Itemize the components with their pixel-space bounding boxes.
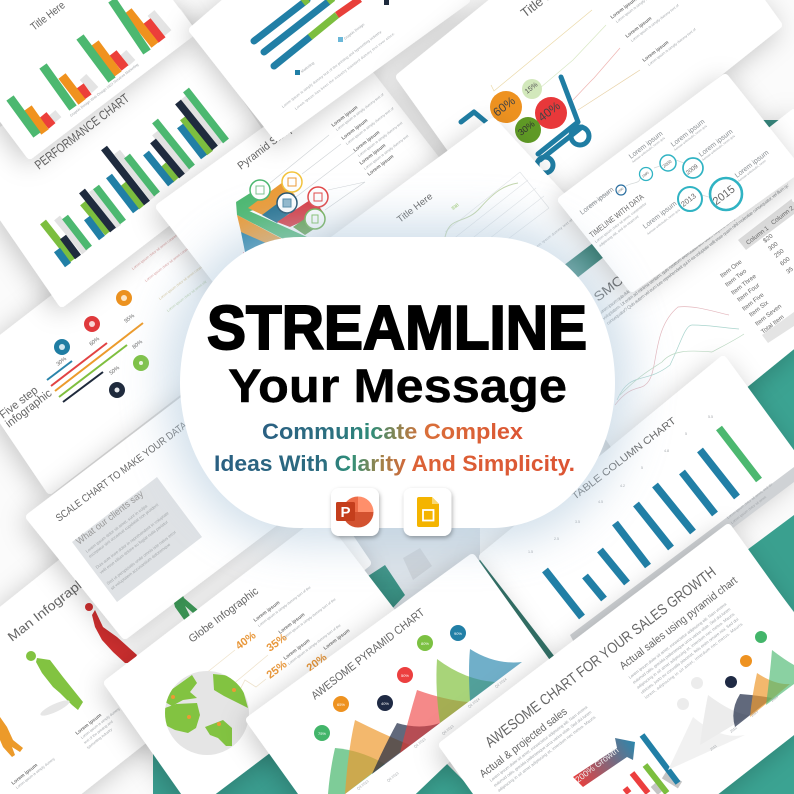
- legend: [295, 0, 389, 75]
- paragraph right: adipiscing in sit amet adipiscing et, interdum nec metus. Mauris: [636, 612, 735, 690]
- teal backdrop shapes: [153, 119, 794, 794]
- subheading: pyramid chart: Actual sales using pyramid chart: [618, 575, 740, 672]
- chart: axis labels: Q3 2013: [356, 779, 370, 791]
- tagline line 2: Ideas With Clarity And Simplicity.: [214, 451, 575, 476]
- timeline labels: Lorem ipsum: [579, 186, 615, 217]
- timeline years: 1990: [617, 186, 625, 194]
- percentages: 40%: [234, 629, 259, 652]
- timeline labels: Lorem ipsum: [734, 149, 770, 180]
- paragraph: Lorem Ipsum has been the industry standard dummy text ever since.: [294, 32, 396, 111]
- panel: line chart: [280, 122, 597, 385]
- quote text: Duis aute irure dolor in reprehenderit in voluptate: [95, 510, 170, 570]
- text blocks: coloured notes: [131, 219, 211, 313]
- table: Item Six: [748, 299, 771, 319]
- chart: value labels: 5.5: [708, 415, 713, 419]
- caption blocks: text of the printing and: [83, 720, 114, 745]
- chart: value circles: 65%: [337, 702, 345, 707]
- quote text: Lorem ipsum dolor sit amet, sunt in culpa: [85, 503, 149, 554]
- quote text: [85, 502, 177, 591]
- paragraph: Lorem ipsum quia dolor sit amet, consectetur, adipisci velit, sed quia non numquam eius modi tempora incidunt ut labore et dolore magnam aliquam: [598, 163, 794, 316]
- text blocks: coloured notes: Lorem ipsum dolor sit amet elit: [166, 280, 207, 313]
- chart: value circles: [314, 625, 466, 741]
- icon: red man: [85, 603, 137, 663]
- panel: performance chart: [0, 12, 268, 303]
- text list: Lorem ipsum: [625, 15, 654, 40]
- bubbles: percentages: 60%: [490, 93, 518, 119]
- chart: value labels: 5: [685, 432, 687, 436]
- quote heading: What our clients say: [74, 489, 146, 547]
- quote text: sit voluptatem accusantium doloremque: [110, 542, 172, 591]
- heading: title here: Title Here: [395, 191, 435, 225]
- icon: dark green man: [172, 588, 198, 621]
- quote text: excepteur sint occaecat cupidatat non proident: [88, 502, 160, 559]
- paragraph right: [628, 601, 743, 700]
- footer strip: [570, 467, 794, 646]
- panel: pyramid samples: [160, 62, 436, 305]
- percentages: 20%: [305, 651, 330, 674]
- table: 300: [767, 240, 780, 253]
- table: 250: [773, 247, 786, 260]
- panel: awesome pyramid chart: [250, 558, 547, 794]
- footer text: Lorem ipsum dolor sit amet: [730, 495, 767, 525]
- timeline captions: Aenean sollicitudin, lorem quis: [646, 208, 681, 236]
- text list: Lorem ipsum: [331, 104, 360, 129]
- percentages: 25%: [265, 658, 290, 681]
- heading: globe infographic: Globe Infographic: [187, 585, 261, 645]
- caption blocks: typesetting industry: [86, 727, 113, 750]
- chart: value labels: [528, 415, 713, 554]
- chart: axis labels: Q4 2013: [441, 724, 455, 736]
- chart: value labels: 1.5: [528, 550, 533, 554]
- timeline years: 2009: [685, 163, 700, 177]
- caption blocks: Lorem ipsum: [11, 762, 39, 787]
- arrow: 200% growth: 200% Growth: [573, 745, 621, 785]
- timeline years: 1995: [641, 171, 650, 179]
- shadow under man: [39, 698, 71, 718]
- panel: title here bar chart: [0, 0, 192, 155]
- icon: powerpoint: [331, 488, 379, 536]
- text blocks: coloured notes: Lorem ipsum dolor sit amet consectetur adipiscing: [131, 219, 197, 271]
- timeline captions: Aenean sollicitudin, lorem quis: [673, 124, 708, 152]
- halo around central badge: [180, 237, 615, 528]
- panel: scale chart: [30, 323, 370, 635]
- text list: Lorem ipsum: [353, 129, 382, 154]
- percentages: [234, 629, 330, 681]
- table: Column 1: [745, 225, 771, 247]
- chart: grouped bars: [43, 90, 226, 265]
- subheading: actual and projected: Actual & projected sales: [478, 705, 570, 780]
- heading: table column chart: TABLE COLUMN CHART: [570, 416, 678, 502]
- text list: [610, 0, 697, 67]
- chart: axis labels: 2014: [770, 695, 779, 703]
- chart: value labels: 5: [641, 466, 643, 470]
- table: Item Seven: [754, 303, 783, 328]
- timeline labels: Lorem ipsum: [670, 118, 706, 149]
- chart: axis labels: [356, 677, 508, 791]
- table: Item Two: [724, 267, 748, 289]
- chart: growth bars: [625, 735, 680, 793]
- panel: table column chart: [483, 360, 794, 653]
- timeline connector: [626, 160, 712, 198]
- connector lines: [270, 135, 365, 210]
- heading: awesome pyramid chart: AWESOME PYRAMID CHART: [309, 607, 427, 702]
- timeline years: [617, 158, 738, 209]
- legend: Graphic Design: [343, 23, 365, 41]
- heading: infographic: infographic: [4, 387, 55, 430]
- timeline captions: Aenean sollicitudin, lorem quis: [631, 136, 666, 164]
- chart: value labels: 4.2: [620, 484, 625, 488]
- panel: man infographic: [0, 405, 367, 794]
- heading: scale chart: SCALE CHART TO MAKE YOUR DATA: [54, 420, 189, 524]
- table: Item One: [719, 258, 744, 280]
- table: [719, 197, 794, 343]
- paragraph left: adipiscing in sit amet adipiscing et, interdum nec metus. Mauris: [497, 715, 596, 793]
- icons: pyramid circles: [250, 172, 328, 229]
- chart: value circles: 50%: [401, 673, 409, 678]
- timeline captions: Aenean sollicitudin: [588, 189, 611, 208]
- caption blocks: Lorem ipsum is simply dummy text of the: [282, 597, 337, 640]
- heading: timeline with data: TIMELINE WITH DATA: [588, 192, 646, 240]
- bubbles: percentages: 40%: [535, 98, 563, 124]
- paragraph right: Lorem ipsum dolor sit amet, consectetur adipiscing elit. Nam viverra: [628, 601, 728, 680]
- legend: Marketing: [300, 61, 315, 74]
- chart: value labels: 4.8: [664, 449, 669, 453]
- bars: percentage lines: [47, 323, 143, 402]
- caption blocks: Lorem ipsum is simply dummy text of the: [287, 623, 342, 666]
- percentages: 35%: [265, 631, 290, 654]
- chart: value labels: 4.5: [598, 500, 603, 504]
- chart: overlapping peaks: [328, 649, 522, 794]
- labels: percentages: 60%: [89, 336, 101, 348]
- chart: axis labels: 2013: [750, 710, 759, 718]
- chart: value labels: 3.5: [575, 520, 580, 524]
- panel: globe infographic: [108, 520, 413, 794]
- chart: peak circles: [677, 631, 767, 710]
- tagline line 1: Communicate Complex: [262, 419, 524, 444]
- table: Item Five: [741, 291, 766, 313]
- chart: value labels: 2.5: [554, 537, 559, 541]
- arrow: 200% growth: [573, 738, 635, 787]
- chart: grid: [445, 172, 549, 264]
- labels: percentages: 80%: [132, 339, 144, 351]
- text list: Lorem ipsum is simply dummy text: [363, 134, 409, 171]
- data label: $38: [451, 202, 460, 211]
- chart: smooth curves: [615, 307, 744, 405]
- connector lines: [190, 650, 268, 725]
- panel: central badge: [180, 237, 615, 536]
- pyramid ribbons: [236, 182, 323, 264]
- text blocks: coloured notes: Lorem ipsum dolor sit amet consectetur: [144, 241, 197, 283]
- timeline labels: Lorem ipsum: [698, 128, 734, 159]
- text list: Lorem ipsum: [642, 39, 671, 64]
- panel: shopping cart infographic: [400, 0, 778, 193]
- panel: smooth chart: [530, 113, 794, 474]
- heading: pyramid samples: Pyramid Samples: [236, 114, 307, 172]
- caption blocks: Lorem ipsum: [278, 612, 307, 636]
- connector lines: [491, 10, 640, 110]
- bubbles: percentages: 30%: [516, 119, 537, 138]
- chart: axis labels: Q1 2013: [413, 737, 427, 749]
- caption blocks: Lorem ipsum: [283, 638, 312, 662]
- table: Item Four: [736, 282, 761, 304]
- timeline years: 2015: [711, 183, 738, 208]
- text list: [331, 93, 409, 178]
- heading: performance chart: PERFORMANCE CHART: [32, 90, 132, 172]
- chart: stacked bars: [254, 0, 328, 66]
- heading: man infographic: Man Infographic: [5, 568, 97, 644]
- labels: percentages: 50%: [109, 365, 121, 377]
- chart: axis labels: Q1 2014: [467, 697, 481, 709]
- paragraph: Lorem ipsum dolor sit amet, consectetur: [594, 201, 648, 244]
- chart: axis labels: Q4 2013: [386, 771, 400, 783]
- chart: axis labels: 2012: [729, 726, 738, 734]
- chart: axis labels: Q2 2014: [494, 677, 508, 689]
- labels: percentages: [56, 313, 144, 377]
- panel: timeline with data: [562, 78, 794, 288]
- timeline years: 2013: [679, 191, 698, 209]
- paragraph left: euismod odio, gravida pellentesque urna varius vitae. Sed dui lorem: [493, 709, 593, 788]
- timeline circles: [616, 155, 742, 211]
- text list: Lorem ipsum: [367, 153, 396, 178]
- timeline captions: [588, 124, 767, 236]
- chart: value circles: 80%: [421, 641, 429, 646]
- icon: orange man: [0, 717, 23, 757]
- paragraph left: Lorem ipsum dolor sit amet, consectetur adipiscing elit. Nam viverra: [489, 704, 589, 783]
- caption blocks: [11, 707, 121, 790]
- quote text: Sed ut perspiciatis unde omnis iste natus error: [106, 529, 177, 586]
- chart: axis labels: [709, 695, 779, 752]
- table: Total Item: [760, 314, 786, 336]
- bubbles: percentages: [490, 79, 567, 143]
- caption blocks: Lorem ipsum is simply dummy text of the: [257, 585, 312, 628]
- paragraph right: euismod odio, gravida pellentesque urna varius vitae. Sed dui lorem: [632, 606, 732, 685]
- paragraph right: ultricies, justo eu convallis placerat, felis enim ornare nisi. Sed dui: [640, 617, 739, 695]
- chart: value circles: 75%: [318, 731, 326, 736]
- text blocks: coloured notes: Lorem ipsum dolor sit amet consectetur: [158, 259, 211, 301]
- paragraph right: lorem, adipiscing in sit amet, interdum nec metus. Mauris: [644, 622, 743, 700]
- panel: stacked bar chart: [193, 0, 466, 137]
- timeline captions: Aenean sollicitudin, lorem quis: [701, 134, 736, 162]
- legend: Graphic Design Web Design SEO Services Marketing: [69, 63, 139, 118]
- caption blocks: Lorem ipsum: [323, 628, 352, 652]
- chart: pyramid peaks: [668, 650, 794, 770]
- caption blocks: Lorem ipsum is simply dummy: [15, 757, 56, 790]
- chart: line: [445, 183, 518, 237]
- paragraph: adipiscing elit, sed do eiusmod: [598, 215, 639, 248]
- timeline labels: [579, 118, 770, 231]
- bubbles: percentages: 15%: [524, 82, 539, 96]
- chart: column bars: [545, 428, 759, 617]
- caption blocks: Lorem ipsum: [253, 600, 282, 624]
- subtitle: your message: Your Message: [228, 359, 567, 412]
- heading: smooth chart: SMOOTH CHART: [591, 219, 695, 304]
- timeline years: 2000: [662, 158, 673, 169]
- table: $20: [762, 232, 775, 245]
- title: streamline: STREAMLINE: [207, 294, 587, 363]
- text list: Lorem Ipsum is simply dummy text of: [630, 4, 680, 43]
- timeline labels: Lorem ipsum: [642, 200, 678, 231]
- caption blocks: Lorem ipsum: [75, 712, 103, 737]
- icon: globe: [165, 671, 249, 755]
- table: 600: [779, 255, 792, 268]
- panel: sales growth chart: [443, 528, 794, 794]
- text list: Lorem ipsum is simply dummy text of: [335, 93, 385, 132]
- icon: powerpoint: P: [340, 504, 351, 521]
- labels: percentages: 95%: [124, 313, 136, 325]
- chart: value circles: 90%: [454, 631, 462, 636]
- heading: awesome chart: AWESOME CHART FOR YOUR SALES GROWTH: [482, 564, 719, 751]
- caption blocks: Lorem ipsum is simply dummy: [80, 707, 121, 740]
- paragraph: Lorem Ipsum dummy text of: [531, 218, 573, 252]
- panel: five step infographic: [0, 150, 330, 490]
- text list: Lorem Ipsum is simply dummy text of: [647, 28, 697, 67]
- text list: Lorem ipsum: [359, 142, 388, 167]
- text list: Lorem ipsum is simply dummy text: [357, 121, 403, 158]
- labels: percentages: 30%: [56, 356, 68, 368]
- chart: clustered bars: [10, 0, 168, 135]
- icons: step circles: [54, 290, 149, 398]
- paragraph: voluptatem. Ut enim ad minima veniam, quis nostrum exercitationem ullam corporis suscipit laboriosam, nisi ut aliquid ex ea commodi: [602, 168, 794, 321]
- icon: google slides: [404, 488, 452, 536]
- timeline labels: Lorem ipsum: [628, 130, 664, 161]
- small card behind timeline: [775, 124, 794, 200]
- chart: axis labels: 2011: [709, 744, 718, 752]
- footer text: Lorem ipsum dolor sit amet, sed do: [726, 482, 773, 520]
- text list: Lorem ipsum: [341, 117, 370, 142]
- icon: green man: [26, 651, 83, 710]
- quote box: [72, 477, 202, 602]
- icon: shopping cart: [461, 77, 589, 173]
- table: Item Three: [730, 273, 758, 297]
- quote text: velit esse cillum dolore eu fugiat nulla pariatur: [99, 519, 169, 575]
- timeline captions: Aenean sollicitudin, lorem: [737, 159, 767, 183]
- caption blocks: [253, 585, 352, 666]
- text list: Lorem ipsum is simply dummy text of: [345, 107, 395, 146]
- paragraph: Lorem Ipsum is simply dummy text of the printing and typesetting industry.: [281, 30, 383, 109]
- chart: value circles: 40%: [381, 701, 389, 706]
